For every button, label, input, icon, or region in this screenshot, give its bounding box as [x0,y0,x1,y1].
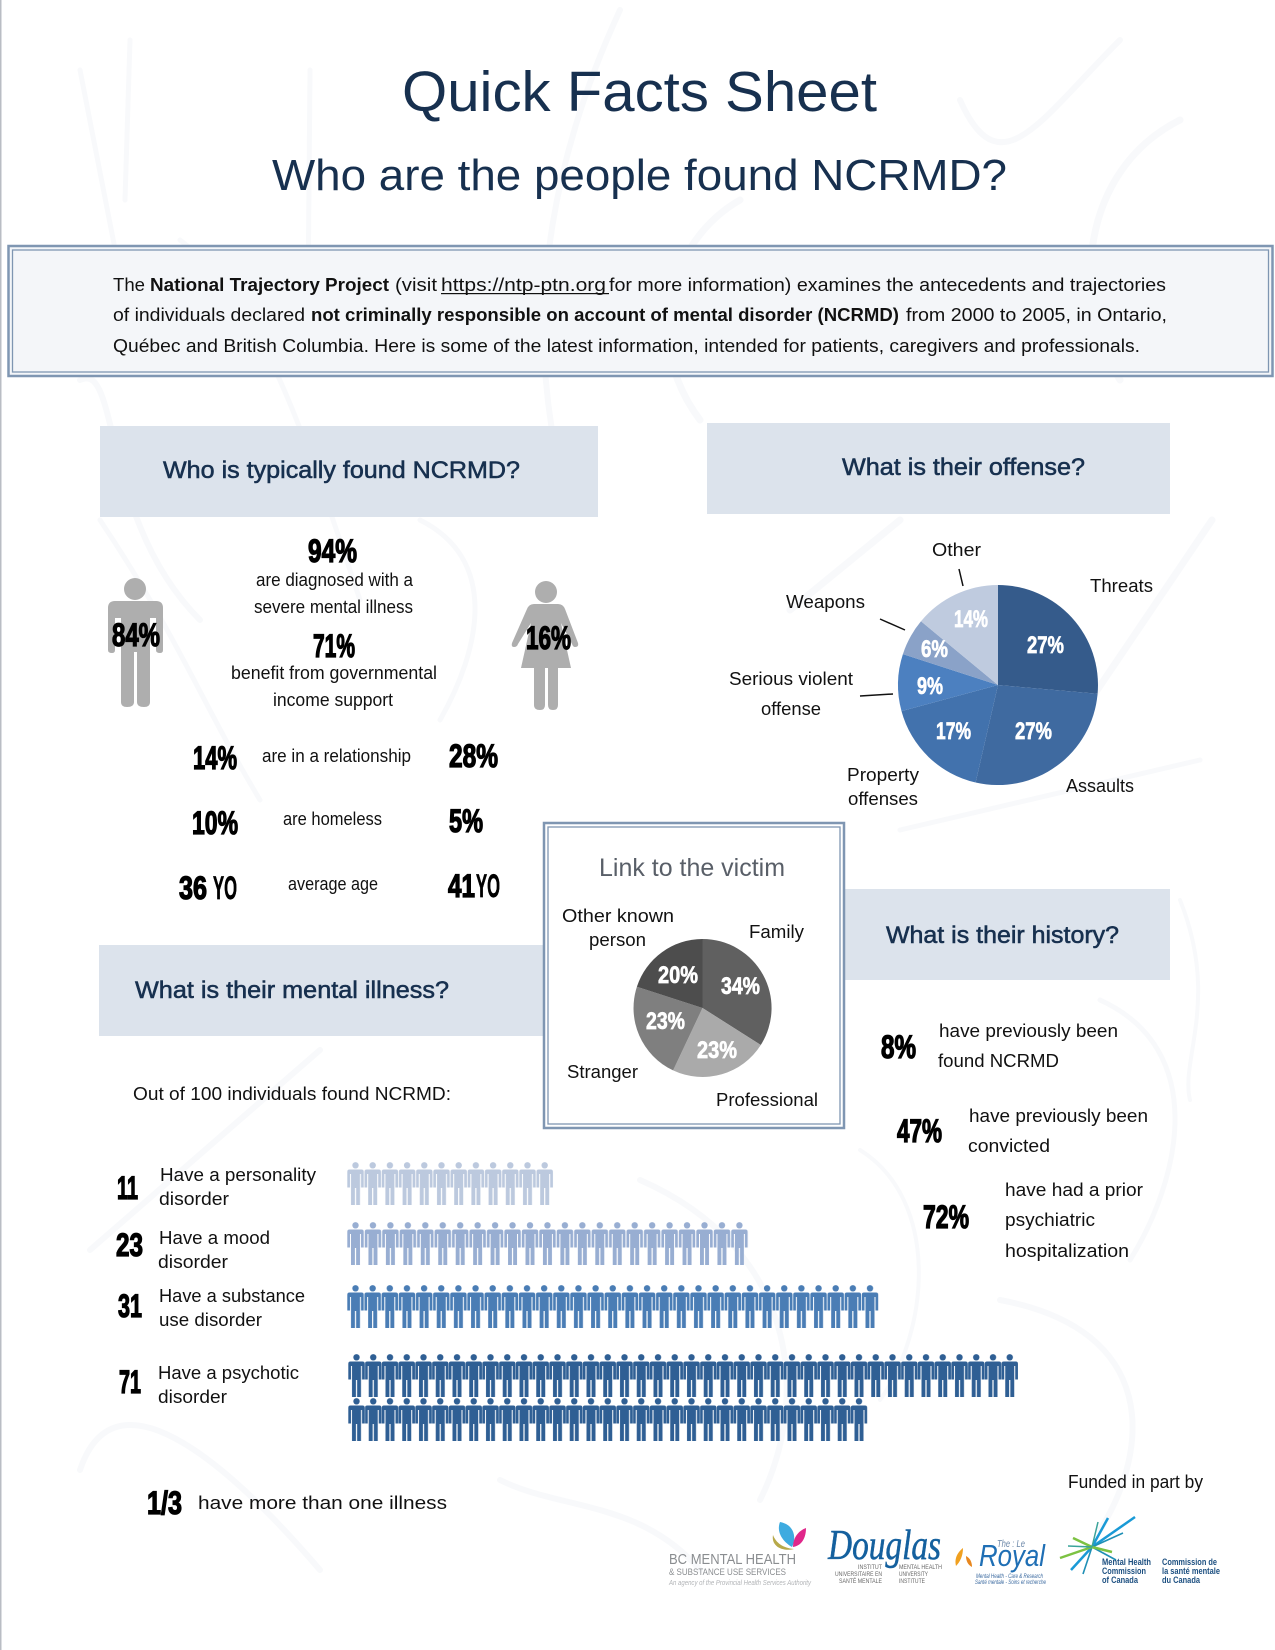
page left border [0,0,2,1650]
pie labels: offenses [848,789,918,809]
logo: Douglas: MENTAL HEALTH [899,1564,942,1571]
panel: introduction: The [113,275,145,295]
panel: link to the victim: Stranger [567,1062,638,1082]
pie labels [729,540,1153,809]
row: average age: average age [288,874,378,894]
pie labels: offense [761,699,821,719]
panel: what is their offense [707,423,1170,809]
row: personality disorder: 11 [117,1170,138,1206]
logo: The Royal: Santé mentale - Soins et recherche [975,1580,1046,1586]
logo: Mental Health Commission of Canada: Commission de [1162,1557,1217,1567]
stat: 72% prior hospitalization: have had a prior [1005,1180,1143,1200]
stat: 8% previously NCRMD: found NCRMD [938,1051,1059,1071]
logo: The Royal: Mental Health - Care & Research [976,1574,1043,1580]
funded by label: Funded in part by [1068,1472,1203,1492]
row: substance use disorder: use disorder [159,1310,262,1330]
stat: 94% severe mental illness: 94% [308,533,357,569]
logo: BC Mental Health: An agency of the Provincial Health Services Authority [668,1580,811,1587]
intro line: Out of 100 individuals found NCRMD: [133,1084,451,1104]
stat: 72% prior hospitalization: psychiatric [1005,1210,1095,1230]
row: in a relationship [193,738,498,776]
pie chart: offense types: 14% [954,606,988,633]
stat: 47% previously convicted: 47% [897,1113,942,1149]
pie labels: Other [932,540,981,560]
subtitle: Who are the people found NCRMD? [272,151,1007,200]
row: in a relationship: 28% [449,738,498,774]
panel: link to the victim: person [589,930,646,950]
panel: link to the victim: Professional [716,1090,818,1110]
row: personality disorder [117,1162,553,1209]
row: in a relationship: 14% [193,740,237,776]
stat: 71% income support: benefit from governmental [231,663,437,683]
stat: 8% previously NCRMD: 8% [881,1029,916,1065]
stat: 8% previously NCRMD: have previously been [939,1021,1118,1041]
stat: 47% previously convicted: have previously been [969,1106,1148,1126]
logo: The Royal: Royal [979,1538,1046,1573]
pie labels: Serious violent [729,669,853,689]
panel: introduction: Québec and British Columbia. Here is some of the latest information, intended for patients, caregivers and professionals. [113,336,1140,356]
heading: offense [707,423,1170,514]
pie labels: Property [847,765,919,785]
logo: BC Mental Health [668,1522,811,1587]
row: personality disorder: disorder [159,1189,229,1209]
logo: The Royal [955,1538,1046,1586]
title: Quick Facts Sheet [402,60,877,124]
pie labels: Threats [1090,576,1153,596]
logo: Douglas: SANTÉ MENTALE [839,1576,883,1585]
stat: one third more than one illness [147,1485,447,1521]
row: mood disorder: disorder [158,1252,228,1272]
stat: 72% prior hospitalization: 72% [923,1199,969,1235]
pie chart: offense types [898,585,1098,785]
panel: history stats [881,1021,1148,1261]
pie labels: Assaults [1066,776,1134,796]
panel: introduction: of individuals declared [113,305,305,325]
logo: Mental Health Commission of Canada: Commission [1102,1566,1146,1576]
panel: introduction: from 2000 to 2005, in Ontario, [906,305,1167,325]
row: mood disorder [116,1222,748,1272]
logo: Mental Health Commission of Canada [1060,1517,1220,1585]
logo: Douglas: UNIVERSITY [899,1571,928,1578]
heading: what is their mental illness [99,945,549,1036]
pie chart: offense types: 27% [1015,718,1052,745]
row: substance use disorder [118,1285,879,1330]
row: personality disorder: Have a personality [160,1165,316,1185]
pie chart: link to victim: 20% [658,962,698,989]
panel: link to the victim: Family [749,922,804,942]
pie chart: offense types: 27% [1027,632,1064,659]
pie chart: link to victim [634,939,772,1077]
stat: 72% prior hospitalization: hospitalization [1005,1241,1129,1261]
row: mood disorder: Have a mood [159,1228,270,1248]
stat: 71% income support [231,628,437,710]
logo: BC Mental Health: & SUBSTANCE USE SERVICES [669,1567,786,1578]
icon: woman 16% [512,581,578,710]
stat: 94% severe mental illness: severe mental illness [254,597,413,617]
logo: Douglas: INSTITUTE [899,1578,926,1585]
pie chart: link to victim: 23% [646,1008,685,1035]
stat: one third more than one illness: have more than one illness [198,1493,447,1513]
panel: link to the victim: Link to the victim [599,854,785,882]
logo: BC Mental Health: BC MENTAL HEALTH [669,1551,796,1568]
stat: 94% severe mental illness: are diagnosed with a [256,570,414,590]
icon: man 84% [108,578,163,707]
panel: introduction: for more information) examines the antecedents and trajectories [609,275,1166,295]
row: substance use disorder: 31 [118,1288,142,1324]
row: average age [179,868,500,906]
funders [668,1472,1220,1587]
logo: Mental Health Commission of Canada: la santé mentale [1162,1566,1220,1576]
row: homeless: 10% [192,805,238,841]
panel: introduction: not criminally responsible on account of mental disorder (NCRMD) [311,305,899,325]
row: average age: 41 [448,868,475,904]
pie chart: link to victim: 34% [721,973,760,1000]
pie chart: offense types: 17% [936,718,971,745]
panel: mental illness breakdown [116,1084,1018,1521]
row: homeless: are homeless [283,809,382,829]
heading: what is their history [844,889,1170,980]
stat: 8% previously NCRMD [881,1021,1118,1071]
stat: 72% prior hospitalization [923,1180,1143,1261]
pie chart: offense types: 9% [917,673,943,700]
heading: what is their mental illness: What is their mental illness? [135,977,449,1004]
stat: 71% income support: 71% [313,628,355,664]
logo: Mental Health Commission of Canada: du Canada [1162,1575,1201,1585]
row: average age: YO [476,868,500,904]
logo: Douglas [827,1523,942,1585]
panel: who is typically found NCRMD [100,426,598,906]
row: mood disorder: 23 [116,1227,143,1263]
heading: what is their history: What is their history? [886,922,1119,949]
stat: one third more than one illness: 1/3 [147,1485,182,1521]
logo: Mental Health Commission of Canada: of Canada [1102,1575,1139,1585]
panel: link to the victim [544,823,844,1128]
heading: who is typically found [100,426,598,517]
logo: Douglas: UNIVERSITAIRE EN [835,1571,882,1578]
row: in a relationship: are in a relationship [262,746,411,766]
panel: introduction [8,246,1272,376]
panel: link to the victim: Other known [562,906,674,926]
panel: introduction: https://ntp-ptn.org [441,275,606,295]
stat: 71% income support: income support [273,690,393,710]
row: psychotic disorder [119,1354,1018,1441]
pie chart: offense types: 6% [921,636,948,663]
row: substance use disorder: Have a substance [159,1286,305,1306]
row: psychotic disorder: 71 [119,1364,141,1400]
logo: Mental Health Commission of Canada: Mental Health [1102,1557,1151,1567]
icon: man 84%: 84% [112,617,160,653]
row: homeless: 5% [449,803,483,839]
heading: who is typically found: Who is typically found NCRMD? [163,457,520,484]
stat: 94% severe mental illness [254,533,414,617]
panel: introduction: (visit [395,275,437,295]
icon: woman 16%: 16% [526,620,571,656]
row: psychotic disorder: Have a psychotic [158,1363,299,1383]
logo: The Royal: The : Le [997,1539,1025,1550]
logo: Douglas: Douglas [827,1523,941,1569]
row: homeless [192,803,483,841]
stat: 47% previously convicted: convicted [968,1136,1050,1156]
logo: Douglas: INSTITUT [858,1564,882,1571]
row: average age: YO [213,870,237,906]
pie labels: Weapons [786,592,865,612]
row: psychotic disorder: disorder [158,1387,227,1407]
row: average age: 36 [179,870,207,906]
panel: introduction: National Trajectory Project [150,275,389,295]
pie chart: link to victim: 23% [697,1037,737,1064]
stat: 47% previously convicted [897,1106,1148,1156]
heading: offense: What is their offense? [842,454,1085,481]
